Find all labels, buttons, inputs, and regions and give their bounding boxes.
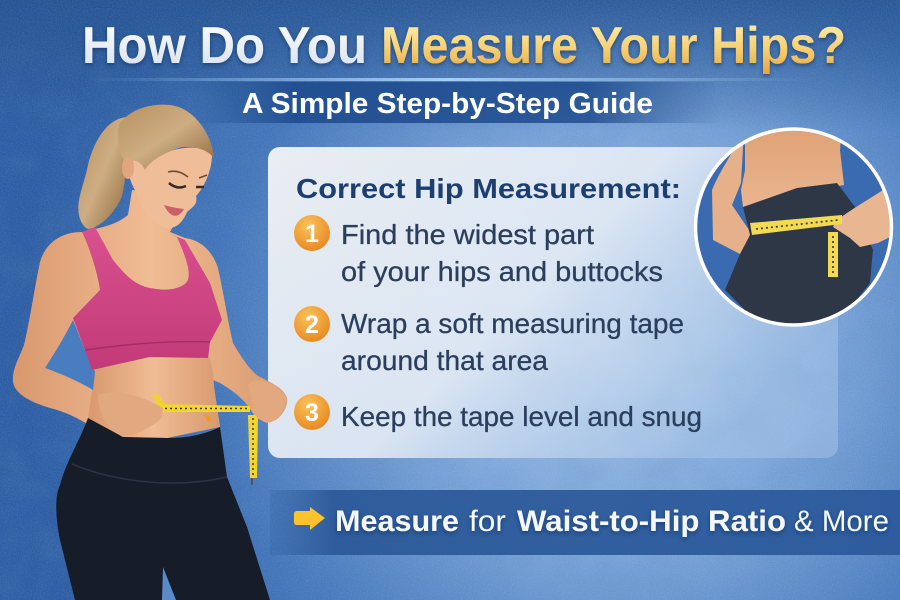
step 2: 2 <box>305 311 319 339</box>
inset tape <box>750 215 842 277</box>
step 3: Keep the tape level and snug <box>341 401 702 432</box>
step 1 <box>294 215 663 287</box>
icon: arrow <box>294 507 325 530</box>
hand on tape right <box>248 380 287 423</box>
banner text: & More <box>794 505 889 538</box>
leg gap <box>162 567 176 600</box>
ear <box>122 157 134 179</box>
hand on tape left <box>98 392 163 437</box>
skin: torso and arms <box>13 190 287 438</box>
title <box>82 17 846 75</box>
banner text: for <box>469 505 506 538</box>
step 1: of your hips and buttocks <box>341 256 663 287</box>
inset leggings <box>725 183 873 325</box>
step 1: 1 <box>305 220 319 248</box>
bra band line <box>85 342 210 350</box>
step 1: Find the widest part <box>341 219 594 250</box>
inset left arm <box>712 144 750 254</box>
inset torso <box>741 125 844 207</box>
panel: correct hip measurement steps <box>268 147 838 458</box>
ponytail <box>78 117 127 229</box>
panel heading: Correct Hip Measurement: <box>296 173 681 204</box>
background gap under left arm <box>45 320 95 390</box>
eyes <box>169 183 204 187</box>
title: Measure Your Hips? <box>381 17 846 75</box>
pink sports bra <box>73 227 222 370</box>
step 2: Wrap a soft measuring tape <box>341 308 684 339</box>
title: How Do You <box>82 17 367 75</box>
brow <box>168 171 207 178</box>
step 2: around that area <box>341 345 548 376</box>
banner text: Waist-to-Hip Ratio <box>517 505 786 538</box>
head <box>128 148 212 228</box>
measuring tape <box>152 394 258 485</box>
step 2 <box>294 306 684 376</box>
lips <box>164 205 184 216</box>
subtitle band <box>190 82 720 123</box>
subtitle: A Simple Step-by-Step Guide <box>242 88 653 120</box>
figure: woman measuring with tape <box>13 105 287 600</box>
bottom banner <box>270 490 900 555</box>
banner text <box>335 505 889 538</box>
title divider <box>90 78 810 81</box>
hair top <box>118 105 214 170</box>
leggings waistband seam <box>72 464 227 483</box>
black leggings <box>56 418 270 600</box>
step 3: 3 <box>305 399 319 427</box>
banner text: Measure <box>335 505 459 538</box>
inset: close-up photo <box>696 125 900 325</box>
inset right arm <box>833 190 890 247</box>
